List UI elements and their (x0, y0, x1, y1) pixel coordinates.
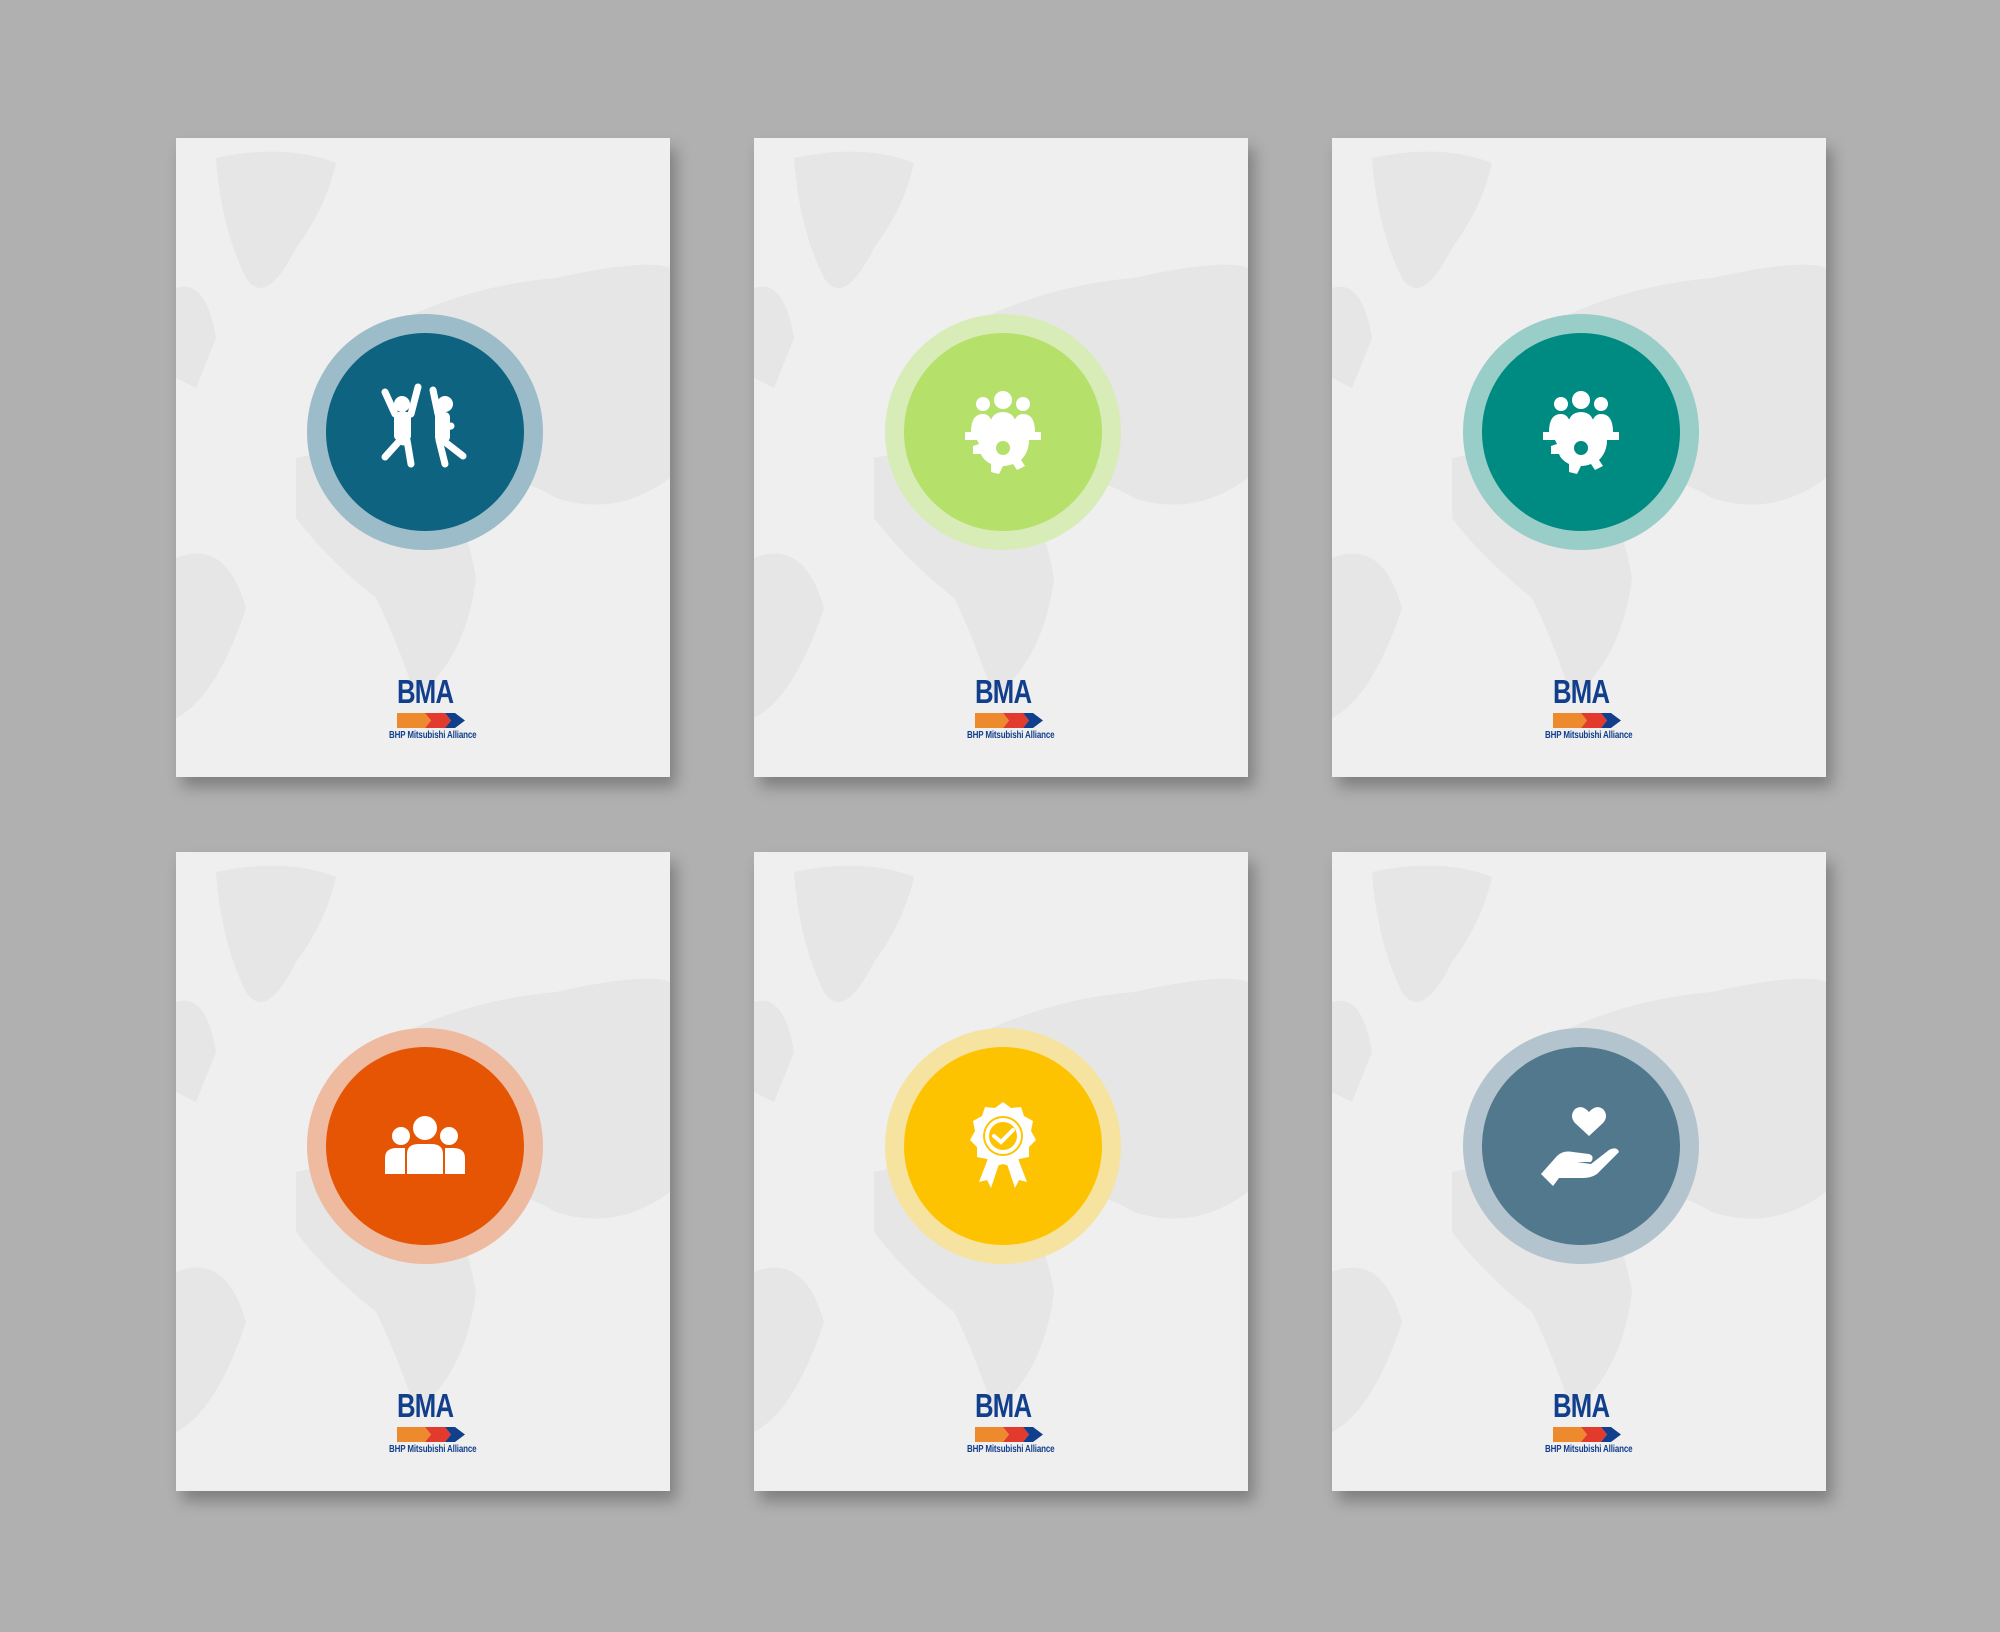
logo (389, 673, 476, 741)
logo: BHP Mitsubishi Alliance (967, 1444, 1054, 1455)
logo: BMA (397, 673, 453, 710)
logo (1545, 1387, 1632, 1455)
icon circle: dancing people (307, 314, 543, 550)
icon circle: team gear (1463, 314, 1699, 550)
logo: BMA (397, 1387, 453, 1424)
logo (1545, 673, 1632, 741)
logo: BHP Mitsubishi Alliance (967, 730, 1054, 741)
logo (967, 673, 1054, 741)
logo: BHP Mitsubishi Alliance (1545, 730, 1632, 741)
icon circle: people group (307, 1028, 543, 1264)
logo: BMA (975, 1387, 1031, 1424)
logo: BHP Mitsubishi Alliance (389, 1444, 476, 1455)
card 5: award (754, 852, 1248, 1491)
logo: BHP Mitsubishi Alliance (389, 730, 476, 741)
logo: BHP Mitsubishi Alliance (1545, 1444, 1632, 1455)
card 1: celebration (176, 138, 670, 777)
logo: BMA (975, 673, 1031, 710)
logo: BMA (1553, 673, 1609, 710)
logo: BMA (1553, 1387, 1609, 1424)
card 3: teamwork gear teal (1332, 138, 1826, 777)
icon circle: team gear (885, 314, 1121, 550)
card 6: care hand (1332, 852, 1826, 1491)
card 2: teamwork gear green (754, 138, 1248, 777)
icon circle: award badge (885, 1028, 1121, 1264)
logo (389, 1387, 476, 1455)
card 4: group (176, 852, 670, 1491)
icon circle: heart in hand (1463, 1028, 1699, 1264)
logo (967, 1387, 1054, 1455)
